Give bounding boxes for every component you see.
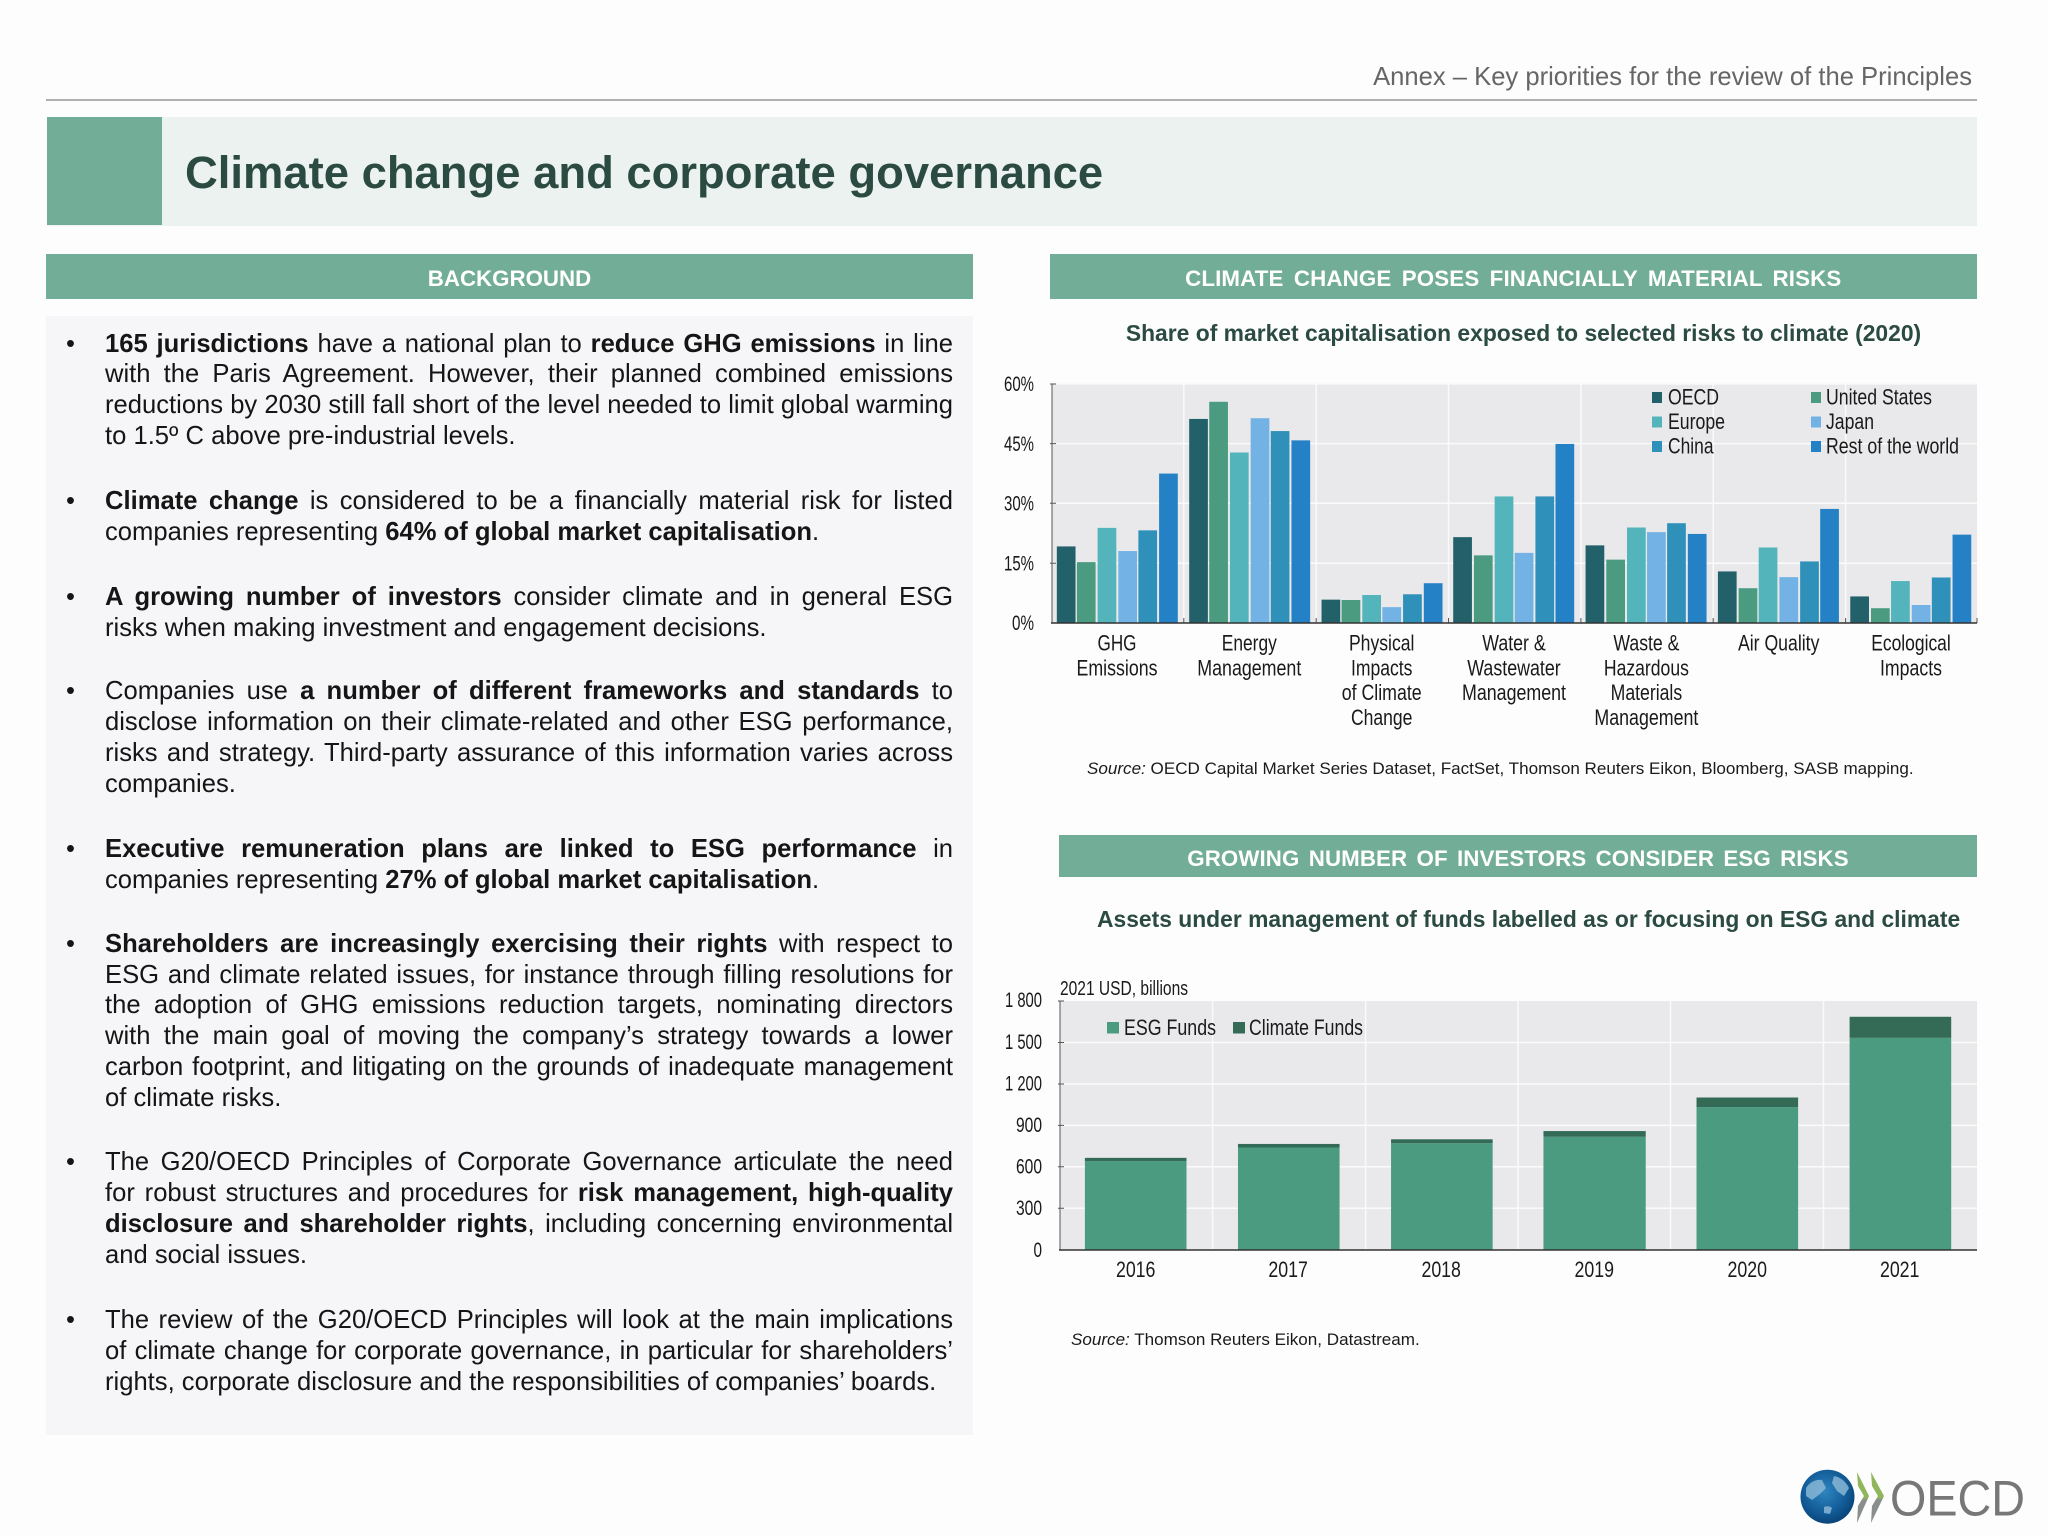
category labels: Change [1351, 705, 1412, 730]
bullet: shareholders [105, 929, 953, 1114]
bullet: frameworks: companies. [105, 770, 236, 798]
bullet: remuneration: companies representing 27% of global market capitalisation. [105, 866, 819, 894]
category labels [1076, 630, 1951, 730]
header: annex line: Annex – Key priorities for the review of the Principles [1373, 63, 1972, 91]
bullet: investors: risks when making investment and engagement decisions. [105, 614, 767, 642]
bullet: investors [105, 582, 953, 643]
year labels: 2020 [1728, 1257, 1767, 1282]
bullet: shareholders: Shareholders are increasingly exercising their rights with respect to [105, 930, 953, 958]
icon: chevrons [1857, 1472, 1884, 1523]
y axis labels: 15% [1004, 552, 1034, 576]
bullet: shareholders: ESG and climate related issues, for instance through filling resolutions for [105, 961, 953, 989]
bar chart: market capitalisation exposure [1004, 373, 1978, 730]
bullet: principles: disclosure and shareholder rights, including concerning environmental [105, 1210, 953, 1238]
category labels: Impacts [1351, 656, 1412, 680]
y axis labels: 30% [1004, 492, 1034, 516]
bullet: principles [105, 1147, 953, 1271]
bars [1085, 1017, 1951, 1250]
category labels: of Climate [1342, 680, 1422, 705]
year labels: 2018 [1421, 1257, 1461, 1282]
heading: investors: GROWING NUMBER OF INVESTORS CONSIDER ESG RISKS [1187, 846, 1849, 871]
bullet: shareholders: the adoption of GHG emissions reduction targets, nominating directors [105, 991, 953, 1019]
heading: background: BACKGROUND [428, 266, 591, 290]
category labels: Materials [1611, 680, 1682, 705]
legend: Climate Funds [1249, 1015, 1363, 1040]
y axis labels [1004, 373, 1034, 635]
bullet: investors: A growing number of investors consider climate and in general ESG [105, 583, 953, 611]
y axis labels [1005, 989, 1042, 1262]
logo: OECD [1800, 1470, 2025, 1526]
unit label: 2021 USD, billions [1060, 978, 1188, 1000]
legend: Europe [1668, 409, 1725, 434]
bullet: review [105, 1305, 953, 1398]
panel: background text [46, 316, 973, 1434]
bullet: remuneration [105, 834, 953, 896]
bullet: financial risk [105, 486, 953, 548]
year labels: 2021 [1880, 1257, 1919, 1282]
bullet: jurisdictions: to 1.5º C above pre-industrial levels. [105, 422, 516, 450]
category labels: Ecological [1871, 630, 1951, 656]
y axis labels: 600 [1016, 1156, 1042, 1178]
heading: climate risks: CLIMATE CHANGE POSES FINANCIALLY MATERIAL RISKS [1185, 266, 1841, 290]
bullet: principles: for robust structures and procedures for risk management, high-quality [105, 1179, 953, 1207]
bullet: shareholders: of climate risks. [105, 1084, 281, 1112]
bullet: frameworks: Companies use a number of different frameworks and standards to [105, 677, 953, 705]
bullet: jurisdictions: 165 jurisdictions have a national plan to reduce GHG emissions in line [105, 330, 953, 358]
y axis labels: 1 200 [1005, 1072, 1042, 1096]
bullet: jurisdictions: reductions by 2030 still fall short of the level needed to limit global warming [105, 391, 953, 419]
legend: Japan [1826, 409, 1874, 434]
bullet: review: The review of the G20/OECD Principles will look at the main implications [105, 1306, 953, 1334]
legend: China [1668, 434, 1714, 458]
y axis labels: 45% [1004, 433, 1034, 456]
category labels: Emissions [1076, 656, 1158, 680]
year labels: 2017 [1268, 1257, 1308, 1282]
bullet: review: of climate change for corporate governance, in particular for shareholders’ [105, 1337, 953, 1365]
title: Climate change and corporate governance [185, 146, 1103, 198]
category labels: Hazardous [1604, 656, 1689, 680]
bullet: frameworks [105, 676, 953, 800]
legend: United States [1826, 384, 1932, 410]
year labels [1116, 1257, 1919, 1282]
logo wordmark: OECD [1890, 1470, 2025, 1526]
chart 1 subtitle: Share of market capitalisation exposed to selected risks to climate (2020) [1126, 320, 1921, 346]
legend: Rest of the world [1826, 434, 1959, 458]
chart 2 source: Source: Thomson Reuters Eikon, Datastream. [1071, 1330, 1420, 1348]
stacked bar chart: ESG assets [1005, 978, 1977, 1282]
bullet: remuneration: Executive remuneration plans are linked to ESG performance in [105, 835, 953, 863]
bullet: frameworks: disclose information on their climate-related and other ESG performance, [105, 708, 953, 736]
bullet: shareholders: carbon footprint, and litigating on the grounds of inadequate management [105, 1053, 953, 1081]
chart 2 subtitle: Assets under management of funds labelled as or focusing on ESG and climate [1097, 906, 1960, 932]
bullet: financial risk: Climate change is considered to be a financially material risk for listed [105, 487, 953, 515]
category labels: Management [1594, 705, 1698, 730]
category labels: Management [1462, 680, 1566, 705]
axes [1050, 384, 1977, 623]
category labels: Management [1197, 656, 1301, 680]
bars [1057, 402, 1971, 623]
category labels: Impacts [1880, 656, 1942, 680]
bullet: review: rights, corporate disclosure and the responsibilities of companies’ boards. [105, 1368, 936, 1396]
heading: background [46, 254, 973, 298]
y axis labels: 900 [1016, 1114, 1042, 1137]
y axis labels: 0% [1012, 612, 1034, 635]
bullet: frameworks: risks and strategy. Third-party assurance of this information varies across [105, 739, 953, 767]
bullet: shareholders: with the main goal of moving the company’s strategy towards a lower [105, 1022, 953, 1050]
heading: climate risks [1050, 254, 1977, 298]
y axis labels: 300 [1016, 1197, 1042, 1220]
bullet: jurisdictions: with the Paris Agreement. However, their planned combined emissions [105, 360, 953, 388]
bullet: financial risk: companies representing 64% of global market capitalisation. [105, 518, 819, 546]
legend: ESG Funds [1124, 1015, 1216, 1040]
bullet: jurisdictions [105, 329, 953, 452]
icon: globe [1800, 1470, 1854, 1524]
year labels: 2016 [1116, 1257, 1155, 1282]
title accent block [47, 117, 162, 225]
title banner [47, 117, 1977, 226]
legend [1107, 1015, 1363, 1040]
legend: OECD [1668, 384, 1719, 410]
category labels: GHG [1098, 630, 1136, 656]
y axis labels: 1 500 [1005, 1031, 1042, 1054]
y axis labels: 0 [1034, 1239, 1042, 1262]
y axis labels: 1 800 [1005, 989, 1042, 1012]
year labels: 2019 [1575, 1257, 1614, 1282]
y axis labels: 60% [1004, 373, 1034, 396]
category labels: Physical [1349, 630, 1414, 656]
bullet: principles: and social issues. [105, 1241, 307, 1269]
category labels: Wastewater [1467, 656, 1561, 680]
category labels: Air Quality [1738, 630, 1819, 656]
chart 1 source: Source: OECD Capital Market Series Dataset, FactSet, Thomson Reuters Eikon, Bloomberg, SASB mapping. [1087, 759, 1914, 778]
axes [1058, 1001, 1064, 1250]
category labels: Waste & [1613, 630, 1680, 656]
category labels: Water & [1482, 630, 1546, 656]
heading: investors [1059, 835, 1977, 877]
category labels: Energy [1222, 630, 1277, 656]
bullet: principles: The G20/OECD Principles of Corporate Governance articulate the need [105, 1148, 953, 1176]
legend [1652, 384, 1959, 458]
